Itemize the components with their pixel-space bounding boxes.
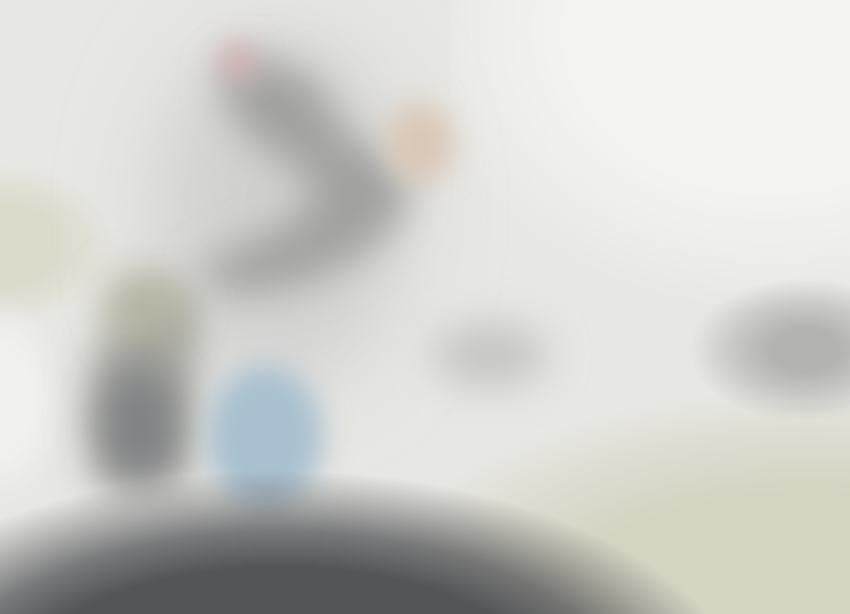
beige ground at lower right	[330, 340, 850, 614]
figure: olive highlight	[103, 271, 187, 339]
dark foreground mound	[0, 440, 850, 614]
distant mound at centre	[432, 323, 548, 387]
white patch at left	[0, 290, 70, 510]
soft grey haze behind figure	[155, 35, 405, 385]
figure: dark lower leg	[102, 367, 178, 483]
tan head	[386, 103, 454, 183]
pink spot	[220, 44, 256, 80]
figure: lower body	[88, 291, 196, 490]
bright sky at upper right	[450, 0, 850, 320]
blue ball	[207, 365, 323, 509]
beige band at left	[0, 160, 120, 330]
distant mound at right	[690, 270, 850, 420]
figure: upper body	[200, 60, 408, 293]
